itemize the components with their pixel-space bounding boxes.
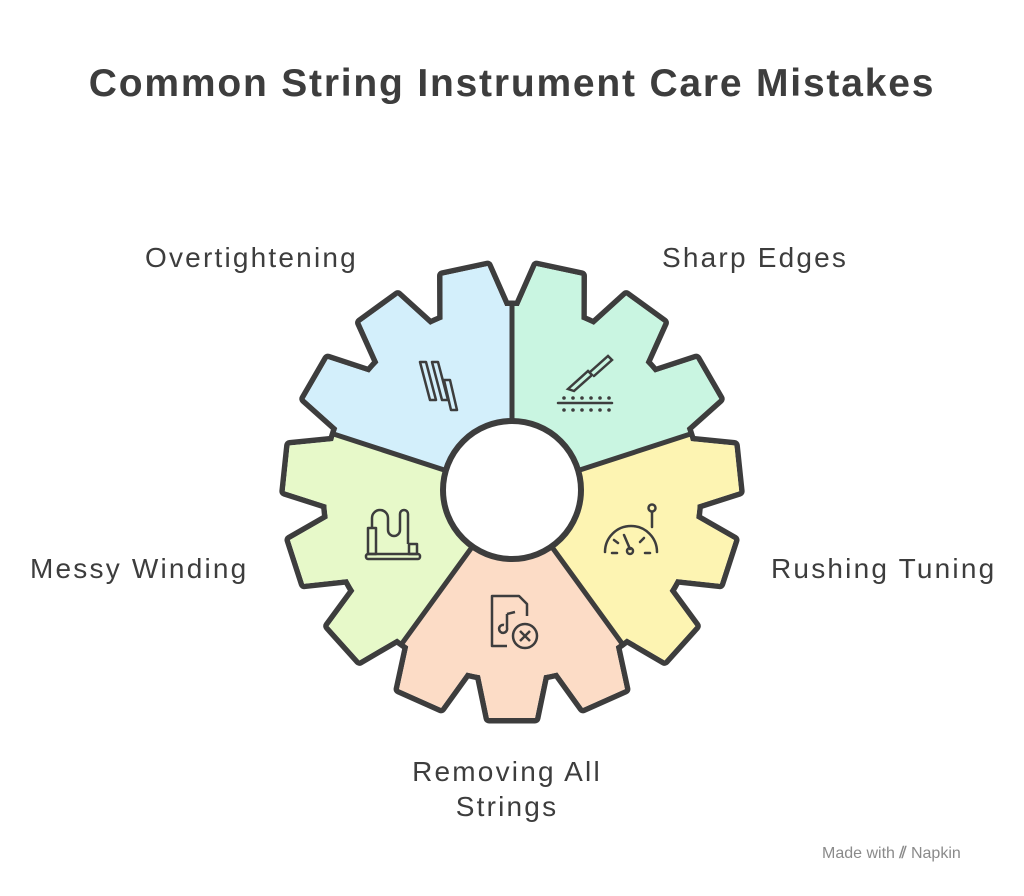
icon: winding (messy winding) — [366, 510, 420, 559]
title: Common String Instrument Care Mistakes — [89, 62, 935, 105]
icon: gauge (rushing tuning) — [605, 504, 657, 554]
segment: messy winding — [284, 437, 468, 660]
icon: spring (overtightening) — [420, 362, 457, 410]
label: Removing All Strings: Strings — [456, 791, 558, 822]
label: Rushing Tuning: Rushing Tuning — [771, 553, 996, 584]
icon: music file with x (removing all strings) — [492, 596, 537, 648]
gear outline — [284, 264, 740, 718]
dividers — [335, 306, 689, 642]
segment: sharp edges — [514, 266, 720, 468]
segments — [284, 266, 740, 718]
icon: knife (sharp edges) — [558, 356, 612, 412]
segment: overtightening — [304, 266, 510, 468]
watermark: Made with ⫽ Napkin — [822, 845, 961, 862]
label: Overtightening: Overtightening — [145, 242, 358, 273]
label: Removing All Strings: Removing All — [412, 756, 602, 787]
segment: rushing tuning — [556, 437, 740, 660]
label: Removing All Strings — [412, 756, 602, 822]
label: Sharp Edges: Sharp Edges — [662, 242, 848, 273]
label: Messy Winding: Messy Winding — [30, 553, 248, 584]
gear diagram — [279, 260, 745, 724]
segment: removing all strings — [399, 550, 625, 718]
center hub — [443, 421, 581, 559]
